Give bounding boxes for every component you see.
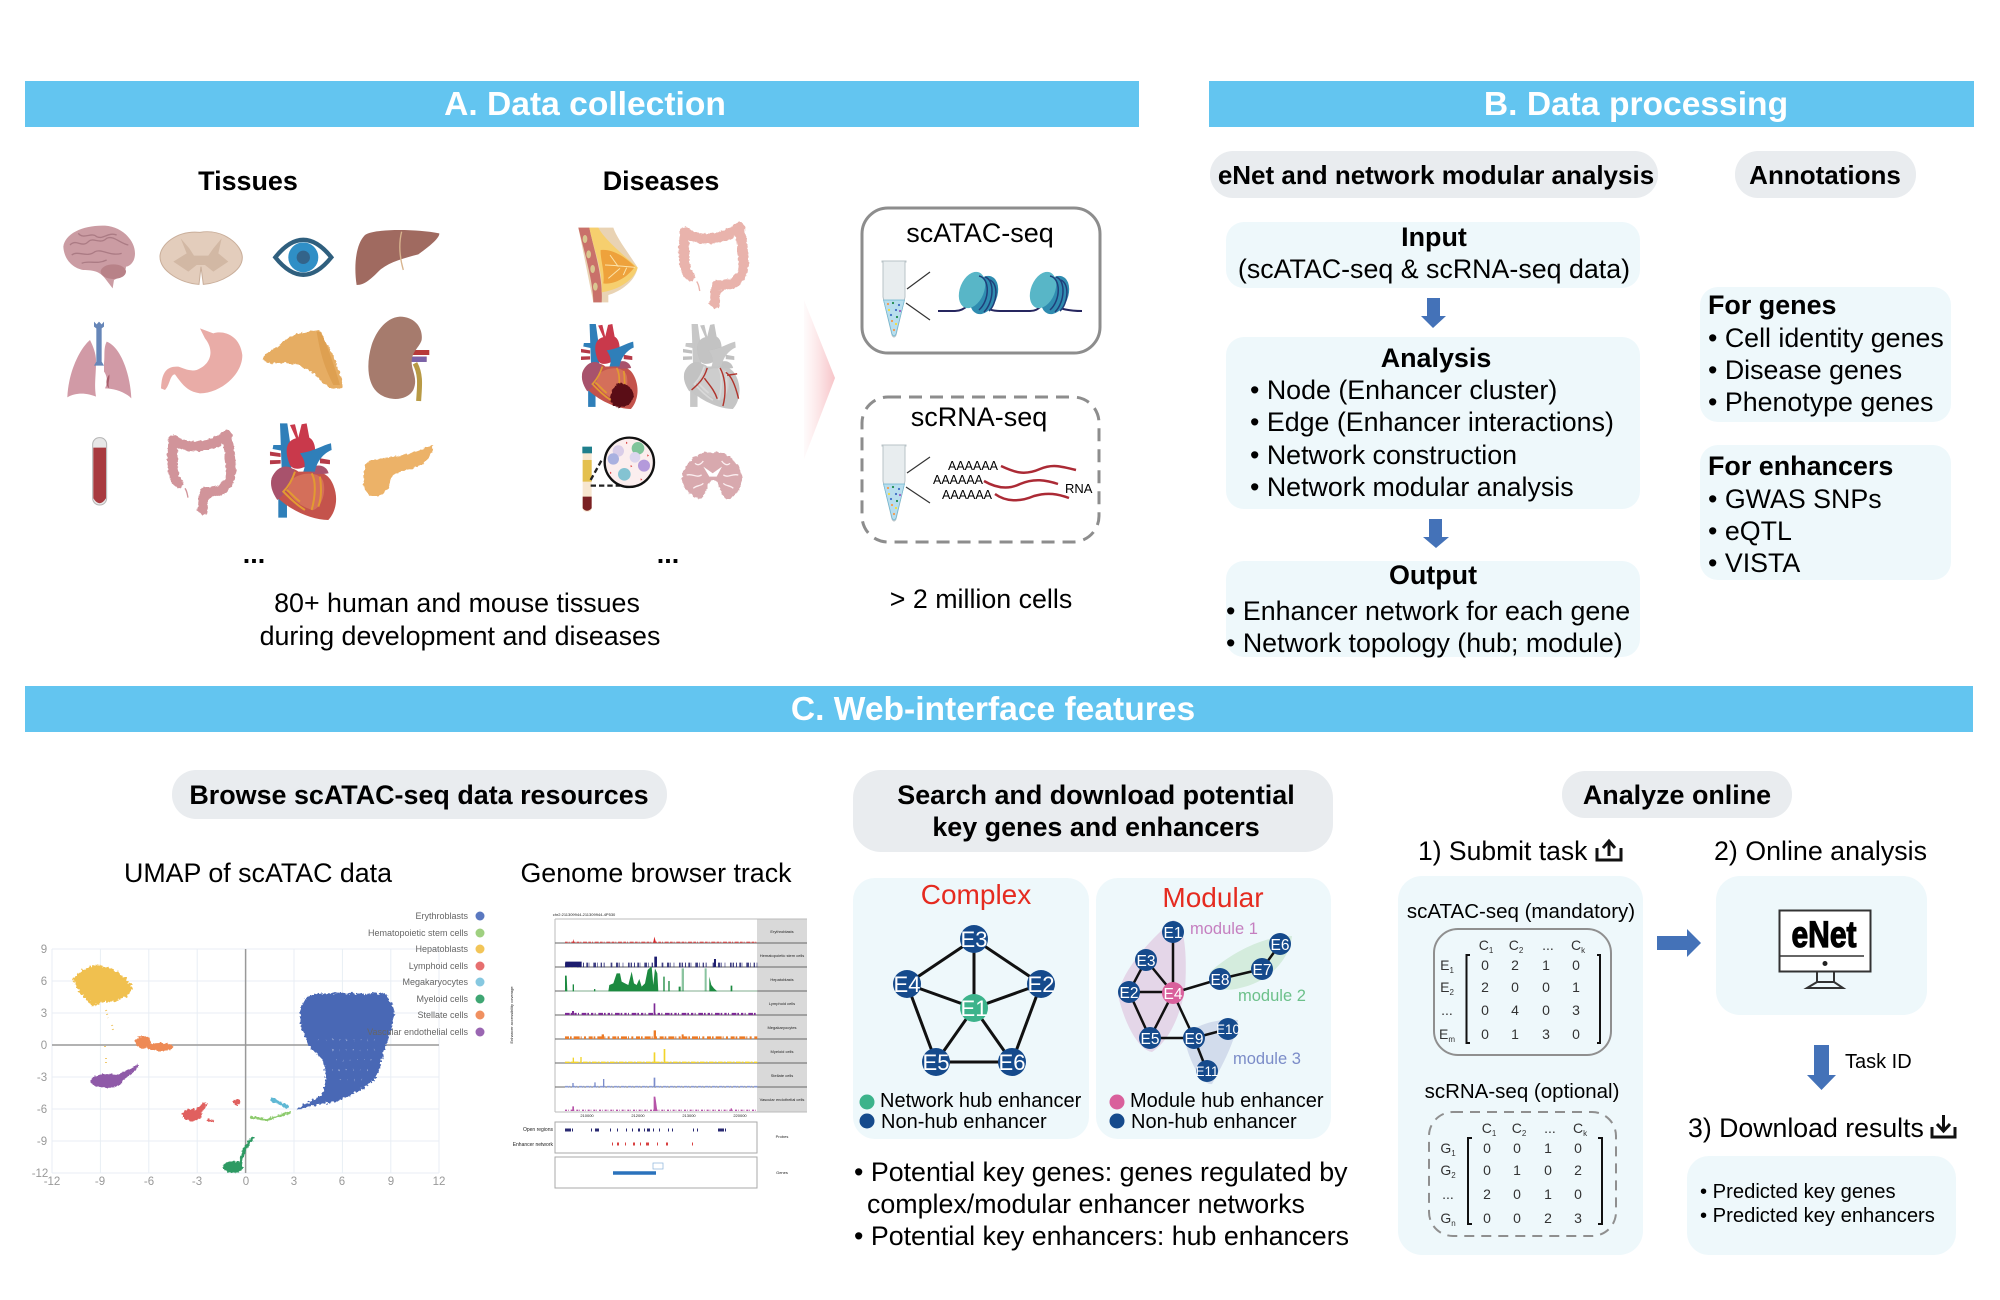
step: Download results: 3) Download results	[1688, 1113, 1924, 1143]
matrix: scRNA: 0	[1483, 1162, 1491, 1178]
node group: E4	[894, 972, 920, 997]
chart: UMAP scatter plot: -12	[44, 1176, 60, 1188]
chart: UMAP scatter plot: -12	[32, 1168, 48, 1180]
cluster: myeloid cells	[223, 1137, 254, 1173]
cluster: hematopoietic stem cells	[250, 1112, 291, 1120]
icon: liver	[355, 230, 439, 285]
node group	[893, 925, 1055, 1076]
matrix: scATAC: 0	[1542, 1002, 1550, 1018]
matrix: scRNA: 2	[1483, 1186, 1491, 1202]
matrix: scATAC: ...	[1542, 937, 1554, 953]
panel: For genes: • Phenotype genes	[1708, 387, 1933, 417]
pill: Annotations	[1735, 151, 1916, 198]
icon: atherosclerotic heart	[683, 324, 740, 409]
ellipsis: tissues: ...	[243, 539, 265, 569]
panel: Modular network	[1096, 878, 1331, 1139]
step: Online analysis: 2) Online analysis	[1714, 836, 1927, 866]
chart: genome browser tracks: Lymphoid cells	[769, 1001, 795, 1006]
chart: genome browser tracks: Myeloid cells	[771, 1049, 793, 1054]
panel: Output: Output	[1389, 560, 1477, 590]
matrix: scATAC: E	[1439, 1026, 1448, 1042]
panel: Analysis: • Node (Enhancer cluster)	[1250, 375, 1557, 405]
matrix: scRNA: 0	[1513, 1186, 1521, 1202]
chart: UMAP scatter plot: -3	[37, 1072, 47, 1084]
matrix: scRNA: 1	[1544, 1186, 1552, 1202]
icon: heart	[270, 423, 336, 520]
legend: Megakaryocytes	[402, 977, 468, 987]
pill: Search and download	[853, 770, 1333, 852]
matrix: scRNA: 0	[1513, 1210, 1521, 1226]
pill: Search and download: key genes and enhancers	[932, 812, 1260, 842]
caption: tissues and diseases	[260, 588, 660, 651]
pill: eNet and network modular analysis: eNet and network modular analysis	[1218, 160, 1654, 190]
header: C. Web-interface features	[25, 686, 1973, 732]
module labels	[1190, 920, 1306, 1068]
node group: E2	[1028, 972, 1054, 997]
header: B. Data processing: B. Data processing	[1484, 86, 1788, 123]
ellipsis: diseases: ...	[657, 539, 679, 569]
legend: complex	[860, 1090, 1082, 1133]
nodes: E4	[1164, 986, 1183, 1003]
chart: UMAP scatter plot: -9	[95, 1176, 105, 1188]
matrix: scATAC: 0	[1511, 979, 1519, 995]
matrix: scRNA: C	[1482, 1120, 1492, 1136]
matrix: scRNA: 2	[1451, 1171, 1456, 1180]
chart: UMAP scatter plot: 0	[41, 1040, 47, 1052]
panel: online analysis monitor: eNet	[1792, 914, 1856, 955]
matrix: scRNA: n	[1451, 1219, 1456, 1228]
panel: For enhancers: For enhancers	[1708, 451, 1893, 481]
chart: genome browser tracks: Probes	[776, 1134, 788, 1139]
arrow: collection to assays	[804, 300, 835, 459]
matrix: scATAC: 2	[1449, 988, 1454, 997]
module labels: module 3	[1233, 1050, 1301, 1068]
panel: Analysis: Analysis	[1381, 343, 1491, 373]
nodes: E10	[1216, 1022, 1240, 1037]
nodes: E6	[1271, 937, 1289, 954]
panel: Analysis: • Edge (Enhancer interactions)	[1250, 407, 1614, 437]
chart: UMAP scatter plot: 9	[388, 1176, 394, 1188]
text block: key genes and enhancers: • Potential key enhancers: hub enhancers	[854, 1221, 1349, 1251]
matrix: scATAC	[1439, 937, 1586, 1044]
matrix: scATAC: 0	[1572, 1026, 1580, 1042]
icon: blood tube	[93, 438, 107, 505]
matrix: scRNA: 0	[1483, 1210, 1491, 1226]
chart: genome browser tracks: 220000	[733, 1113, 747, 1118]
chart: genome browser tracks	[509, 912, 807, 1188]
icon: stomach	[161, 328, 242, 393]
chart: UMAP scatter plot	[32, 911, 484, 1188]
panel: For genes: • Cell identity genes	[1708, 323, 1944, 353]
panel: scATAC-seq: scATAC-seq	[906, 218, 1054, 248]
heading: Genome browser track: Genome browser track	[520, 858, 792, 888]
header: B. Data processing	[1209, 81, 1974, 127]
heading: Diseases: Diseases	[603, 166, 719, 196]
heading: UMAP of scATAC data: UMAP of scATAC data	[124, 858, 392, 888]
icon: colon	[172, 435, 231, 510]
matrix: scATAC: C	[1479, 937, 1489, 953]
node group: E5	[923, 1050, 949, 1075]
arrow: input to analysis	[1421, 298, 1446, 328]
pill: Search and download: Search and download potential	[897, 780, 1295, 810]
caption: tissues and diseases: during development and diseases	[260, 621, 660, 651]
matrix: scRNA: C	[1573, 1120, 1583, 1136]
text block: key genes and enhancers: • Potential key genes: genes regulated by	[854, 1157, 1348, 1187]
chart: UMAP scatter plot: -9	[37, 1136, 47, 1148]
panel: submit task matrices	[1398, 876, 1643, 1255]
matrix: scATAC: 2	[1519, 946, 1524, 955]
icon: eye	[275, 240, 331, 275]
matrix: scRNA: G	[1440, 1210, 1451, 1226]
icon: lungs	[67, 322, 131, 398]
caption: tissues and diseases: 80+ human and mouse tissues	[274, 588, 640, 618]
arrow: analysis to output	[1423, 519, 1449, 548]
matrix: scATAC: E	[1440, 979, 1449, 995]
nodes: E9	[1185, 1031, 1203, 1048]
icon: blood sample with cells	[582, 438, 654, 512]
pill: Browse scATAC-seq data resources	[172, 770, 667, 819]
matrix: scATAC: 1	[1489, 946, 1494, 955]
matrix: scRNA: G	[1440, 1140, 1451, 1156]
matrix: scATAC: 1	[1449, 966, 1454, 975]
step: Submit task: 1) Submit task	[1418, 836, 1588, 866]
legend: complex: Non-hub enhancer	[881, 1111, 1047, 1133]
panel: For genes: For genes	[1708, 290, 1837, 320]
chart: genome browser tracks: Hepatoblasts	[770, 977, 794, 982]
chart: genome browser tracks: 210000	[580, 1113, 594, 1118]
panel: Input	[1226, 222, 1640, 288]
legend	[367, 911, 484, 1037]
matrix: scRNA: k	[1583, 1129, 1588, 1138]
panel: Input: Input	[1401, 222, 1467, 252]
panel: Analysis: • Network modular analysis	[1250, 472, 1574, 502]
chart: UMAP scatter plot: 0	[243, 1176, 249, 1188]
chart: UMAP scatter plot: 6	[41, 976, 47, 988]
header: A. Data collection: A. Data collection	[444, 86, 726, 123]
module labels: module 2	[1238, 987, 1306, 1005]
matrix: scRNA: 1	[1492, 1129, 1497, 1138]
matrix: scRNA: 1	[1513, 1162, 1521, 1178]
matrix: scATAC: 0	[1542, 979, 1550, 995]
panel: results: • Predicted key genes	[1700, 1181, 1896, 1203]
nodes: E1	[1164, 925, 1182, 942]
panel: Input: (scATAC-seq & scRNA-seq data)	[1238, 254, 1630, 284]
icon: colon (disease)	[684, 227, 743, 304]
module labels: module 1	[1190, 920, 1258, 938]
chart: genome browser tracks: 212000	[631, 1113, 645, 1118]
matrix: scATAC: 2	[1481, 979, 1489, 995]
panel: For genes: • Disease genes	[1708, 355, 1902, 385]
matrix: scRNA: 0	[1574, 1186, 1582, 1202]
panel: results: • Predicted key enhancers	[1700, 1205, 1935, 1227]
legend: complex: Network hub enhancer	[880, 1090, 1082, 1112]
icon: breast	[578, 228, 638, 302]
matrix: scATAC: 0	[1481, 1002, 1489, 1018]
icon: kidney	[368, 317, 429, 401]
panel: Analysis: • Network construction	[1250, 440, 1517, 470]
cluster: lymphoid cells	[182, 1099, 241, 1121]
panel: For genes	[1700, 287, 1951, 422]
panel: For enhancers: • GWAS SNPs	[1708, 484, 1882, 514]
chart: genome browser tracks: Enhancer network	[513, 1142, 553, 1148]
chart: UMAP scatter plot: 3	[291, 1176, 297, 1188]
panel: For enhancers: • eQTL	[1708, 516, 1792, 546]
panel: results	[1687, 1156, 1956, 1255]
matrix: scRNA: 2	[1522, 1129, 1527, 1138]
matrix: scATAC: 1	[1542, 957, 1550, 973]
chart: genome browser tracks: Megakaryocytes	[767, 1025, 797, 1030]
legend: Hepatoblasts	[415, 944, 468, 954]
legend: Vascular endothelial cells	[367, 1027, 468, 1037]
matrix: scATAC: 1	[1511, 1026, 1519, 1042]
matrix: scRNA: G	[1440, 1162, 1451, 1178]
legend: Stellate cells	[417, 1010, 468, 1020]
matrix: scRNA: 2	[1544, 1210, 1552, 1226]
nodes: E11	[1195, 1064, 1219, 1079]
matrix: scATAC: 3	[1542, 1026, 1550, 1042]
caption: cell count: > 2 million cells	[890, 584, 1072, 614]
legend: Lymphoid cells	[409, 961, 468, 971]
header: C. Web-interface features: C. Web-interface features	[791, 691, 1195, 728]
pill: eNet and network modular analysis	[1210, 151, 1658, 198]
chart: genome browser tracks: Hematopoietic stem cells	[760, 953, 804, 958]
text block: key genes and enhancers: complex/modular enhancer networks	[867, 1189, 1305, 1219]
matrix: scATAC: ...	[1441, 1002, 1453, 1018]
nodes: E3	[1137, 953, 1155, 970]
matrix: scATAC: 0	[1481, 957, 1489, 973]
panel: Output	[1226, 560, 1640, 658]
matrix: scRNA: ...	[1442, 1186, 1454, 1202]
panel: Complex network	[853, 878, 1089, 1139]
node group: E3	[961, 927, 987, 952]
matrix: scATAC: 0	[1572, 957, 1580, 973]
matrix: scATAC: 0	[1481, 1026, 1489, 1042]
panel: scRNA-seq: AAAAAA	[948, 459, 999, 473]
icon: diseased heart	[581, 324, 638, 409]
matrix: scATAC: 2	[1511, 957, 1519, 973]
panel: scRNA-seq: scRNA-seq	[911, 402, 1047, 432]
pill: Browse scATAC-seq data resources: Browse scATAC-seq data resources	[189, 780, 649, 810]
panel: Complex network: Complex	[921, 879, 1031, 910]
cluster: megakaryocytes	[271, 1099, 288, 1107]
legend: modular: Module hub enhancer	[1130, 1090, 1324, 1112]
chart: genome browser tracks: Erythroblasts	[770, 929, 794, 934]
icon: brain	[63, 226, 135, 288]
matrix: scRNA: 0	[1483, 1140, 1491, 1156]
chart: UMAP scatter plot: -6	[144, 1176, 154, 1188]
panel: scRNA-seq	[862, 397, 1099, 542]
panel: scRNA-seq: AAAAAA	[942, 488, 993, 502]
track signals	[565, 937, 757, 1111]
chart: genome browser tracks: Enhancer accessibility coverage	[509, 986, 514, 1044]
matrix: scATAC: C	[1571, 937, 1581, 953]
panel: For enhancers: • VISTA	[1708, 548, 1800, 578]
matrix: scRNA: 2	[1574, 1162, 1582, 1178]
matrix: scRNA: 1	[1544, 1140, 1552, 1156]
pill: Analyze online	[1562, 771, 1792, 818]
matrix: scRNA: C	[1512, 1120, 1522, 1136]
legend: Myeloid cells	[416, 994, 468, 1004]
matrix: scATAC: C	[1509, 937, 1519, 953]
legend: Hematopoietic stem cells	[368, 928, 468, 938]
panel: Analysis	[1226, 337, 1640, 509]
matrix: scATAC: 3	[1572, 1002, 1580, 1018]
chart: genome browser tracks: Genes	[776, 1170, 788, 1175]
chart: UMAP scatter plot: 6	[339, 1176, 345, 1188]
matrix: scATAC: E	[1440, 957, 1449, 973]
node group: E1	[961, 996, 987, 1021]
cluster: erythroblasts	[295, 993, 394, 1110]
legend: modular: Non-hub enhancer	[1131, 1111, 1297, 1133]
chart: genome browser tracks: chr2:211309944-211309944-4P530	[553, 912, 616, 917]
chart: genome browser tracks: Stellate cells	[771, 1073, 793, 1078]
cluster: hepatoblasts	[73, 965, 132, 1066]
pill: Analyze online: Analyze online	[1583, 780, 1771, 810]
chart: UMAP scatter plot: 3	[41, 1008, 47, 1020]
heading: Tissues: Tissues	[198, 166, 298, 196]
panel: scATAC-seq	[862, 208, 1100, 353]
panel: Output: • Enhancer network for each gene	[1226, 596, 1630, 626]
matrix: scRNA: 1	[1451, 1149, 1456, 1158]
panel: online analysis monitor	[1716, 876, 1927, 1015]
matrix: scRNA: 0	[1574, 1140, 1582, 1156]
nodes	[1118, 921, 1291, 1082]
matrix: scATAC: 1	[1572, 979, 1580, 995]
arrow: analysis to results	[1807, 1045, 1836, 1090]
header: A. Data collection	[25, 81, 1139, 127]
panel: For enhancers	[1700, 445, 1951, 580]
panel: submit task matrices: scATAC-seq (mandatory)	[1407, 900, 1635, 923]
chart: UMAP scatter plot: 9	[41, 944, 47, 956]
chart: genome browser tracks: Vascular endothelial cells	[760, 1097, 804, 1102]
panel: Modular network: Modular	[1162, 882, 1264, 913]
icon: brain section	[682, 452, 743, 499]
chart: genome browser tracks: 213000	[682, 1113, 696, 1118]
matrix: scATAC: 4	[1511, 1002, 1519, 1018]
cluster: stellate cells	[135, 1036, 173, 1051]
legend: Erythroblasts	[415, 911, 468, 921]
nodes: E8	[1211, 972, 1229, 989]
panel: Output: • Network topology (hub; module)	[1226, 628, 1623, 658]
icon: spinal cord	[160, 232, 242, 284]
chart: UMAP scatter plot: 12	[433, 1176, 445, 1188]
nodes: E7	[1253, 962, 1271, 979]
chart: UMAP scatter plot: -3	[192, 1176, 202, 1188]
matrix: scATAC: m	[1448, 1035, 1455, 1044]
icon: adrenal gland	[262, 330, 343, 389]
nodes: E5	[1141, 1031, 1159, 1048]
nodes: E2	[1120, 985, 1138, 1002]
icon: pancreas	[363, 446, 433, 496]
chart: genome browser tracks: Open regions	[523, 1127, 553, 1133]
arrow: submit to analysis	[1657, 929, 1701, 957]
panel: submit task matrices: scRNA-seq (optional)	[1425, 1080, 1619, 1103]
matrix: scRNA: 3	[1574, 1210, 1582, 1226]
pill: Annotations: Annotations	[1749, 160, 1901, 190]
legend: modular	[1110, 1090, 1324, 1133]
matrix: scRNA	[1440, 1120, 1588, 1228]
label: Task ID: Task ID	[1845, 1051, 1912, 1073]
cluster: vascular endothelial cells	[90, 1064, 138, 1088]
matrix: scRNA: 0	[1544, 1162, 1552, 1178]
chart: UMAP scatter plot: -6	[37, 1104, 47, 1116]
matrix: scRNA: 0	[1513, 1140, 1521, 1156]
panel: scRNA-seq: RNA	[1065, 481, 1093, 496]
matrix: scATAC: k	[1581, 946, 1586, 955]
text block: key genes and enhancers	[854, 1157, 1349, 1251]
panel: scRNA-seq: AAAAAA	[933, 473, 984, 487]
node group: E6	[999, 1050, 1025, 1075]
matrix: scRNA: ...	[1544, 1120, 1556, 1136]
